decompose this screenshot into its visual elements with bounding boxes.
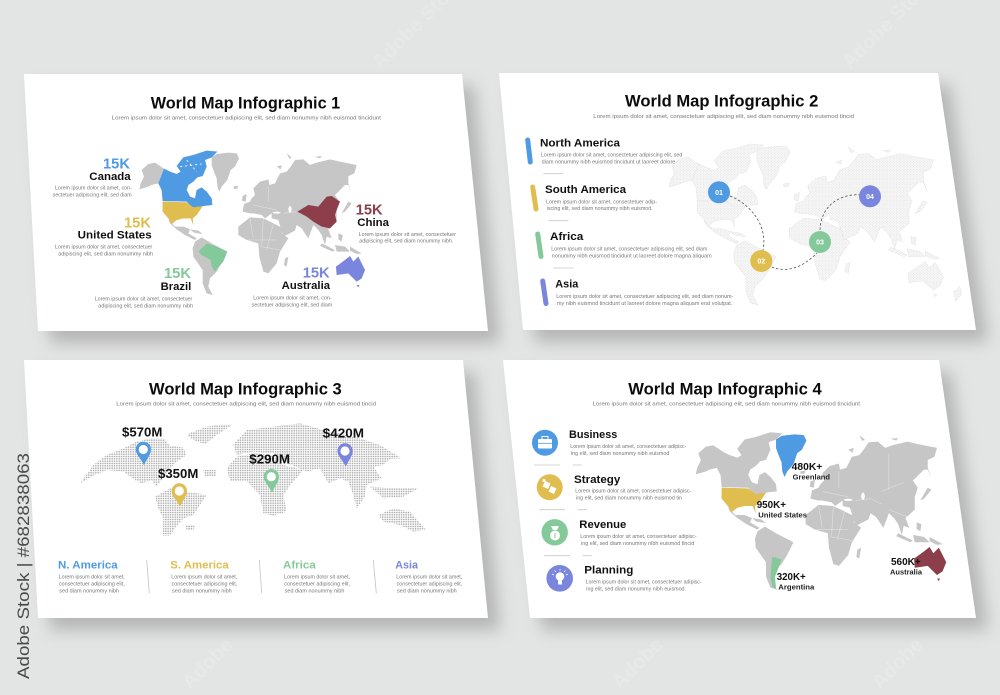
item: South America: iscing elit, sed diam nonummy nibh euismod. <box>547 206 653 212</box>
pin: Africa <box>249 451 290 492</box>
pin: Africa: $290M <box>249 451 290 466</box>
marker 02: 02 <box>757 258 765 266</box>
label: United States <box>757 500 807 519</box>
item: Revenue <box>542 519 697 547</box>
callout: China: 15K <box>356 201 383 218</box>
pin: N. America: $570M <box>122 425 162 440</box>
item: Africa <box>538 231 712 259</box>
item: Africa: nonummy nibh euismod tincidunt ut laoreet dolore magna aliquam <box>552 253 712 259</box>
item: Asia: my nibh euismod tincidunt ut laoreet dolore magna aliquam erat volutpat. <box>557 301 732 307</box>
title 2: World Map Infographic 2 <box>625 93 818 111</box>
stock id side label: Adobe Stock | #682838063 <box>14 453 33 679</box>
subtitle 4: Lorem ipsum dolor sit amet, consectetuer adipiscing elit, sed diam nonummy nibh euismod tincidunt <box>593 401 861 407</box>
marker 04: 04 <box>866 194 874 201</box>
icon: money bag <box>542 519 568 546</box>
callout: United States <box>55 214 153 258</box>
callout: United States: Lorem ipsum dolor sit amet, consectetuer <box>55 245 153 251</box>
item: Strategy <box>537 474 692 502</box>
callout: Brazil <box>95 265 193 309</box>
callout: China: China <box>357 217 390 229</box>
column: Asia <box>395 559 462 594</box>
item: Business: Lorem ipsum dolor sit amet, consectetuer adipisc- <box>570 444 687 450</box>
column: Africa: consectetuer adipiscing elit, <box>284 582 350 588</box>
column: Asia: Asia <box>395 559 419 571</box>
column: Africa <box>283 559 350 594</box>
item: North America <box>528 137 683 165</box>
column: Africa: Lorem ipsum dolor sit amet, <box>284 575 350 581</box>
callout: Australia: Australia <box>282 280 331 292</box>
item: Planning: Planning <box>584 564 633 576</box>
column: N. America: Lorem ipsum dolor sit amet, <box>59 575 125 581</box>
column: S. America: Lorem ipsum dolor sit amet, <box>171 575 237 581</box>
callout: China: Lorem ipsum dolor sit amet, consectetuer <box>359 232 456 238</box>
callout: Australia: 15K <box>303 264 330 281</box>
marker 03: 03 <box>816 240 824 246</box>
callout: Canada <box>53 155 132 199</box>
pin: S. America <box>158 466 198 507</box>
label: Australia <box>890 557 923 576</box>
callout: United States: adipiscing elit, sed diam nonummy nibh <box>58 252 153 258</box>
pin: Asia <box>323 426 364 467</box>
title 3: World Map Infographic 3 <box>149 380 342 398</box>
marker 04 <box>859 185 881 207</box>
subtitle 2: Lorem ipsum dolor sit amet, consectetuer adipiscing elit, sed diam nonummy nibh euismod tincid <box>593 114 854 120</box>
world map with highlighted countries <box>139 151 365 295</box>
title 4: World Map Infographic 4 <box>628 380 823 398</box>
icon: puzzle <box>537 474 563 500</box>
column: S. America: sed diam nonummy nibh <box>172 588 232 594</box>
callout: Canada: 15K <box>103 155 130 172</box>
item: Revenue: Revenue <box>579 519 626 531</box>
callout: China: adipiscing elit, sed diam nonummy nibh. <box>359 239 453 245</box>
item: Asia <box>543 279 734 307</box>
panel: infographic 1 <box>24 74 500 343</box>
background watermark: Adobe <box>868 634 928 694</box>
label: United States: United States <box>758 510 807 519</box>
callout: Australia: Lorem ipsum dolor sit amet, con- <box>253 295 332 301</box>
item: Asia: Lorem ipsum dolor sit amet, consectetuer adipiscing elit, sed diam nonum- <box>556 294 734 300</box>
column: S. America <box>170 559 237 594</box>
item: Planning: Lorem ipsum dolor sit amet, consectetuer adipisc- <box>586 579 702 585</box>
pin: N. America <box>122 425 162 465</box>
subtitle 1: Lorem ipsum dolor sit amet, consectetuer adipiscing elit, sed diam nonummy nibh euismod tincidunt <box>112 116 382 122</box>
title 1: World Map Infographic 1 <box>151 94 340 112</box>
icon: briefcase <box>532 430 558 456</box>
column: Asia: consectetuer adipiscing elit, <box>397 582 462 588</box>
callout: China <box>356 201 456 245</box>
marker 01: 01 <box>715 190 723 197</box>
label: Greenland <box>792 462 830 481</box>
callout: Australia: sectetuer adipiscing elit, sed diam <box>252 302 332 308</box>
callout: Canada: Lorem ipsum dolor sit amet, con- <box>55 186 132 192</box>
marker 01 <box>708 181 730 203</box>
column: Asia: Lorem ipsum dolor sit amet, <box>396 575 462 581</box>
column: S. America: S. America <box>170 559 230 571</box>
item: Business: ing elit, sed diam nonummy nibh euismod <box>571 451 670 457</box>
panel: infographic 2 <box>499 73 988 342</box>
callout: Australia <box>252 264 332 308</box>
panel: infographic 4 <box>503 360 988 630</box>
item: Revenue: Lorem ipsum dolor sit amet, consectetuer adipisc- <box>580 534 697 540</box>
background watermark: Adobe <box>608 634 668 694</box>
curved dot world map <box>80 423 426 536</box>
column: N. America: consectetuer adipiscing elit, <box>59 582 125 588</box>
label: Greenland: Greenland <box>793 472 830 481</box>
item: South America: Lorem ipsum dolor sit amet, consectetuer adip- <box>546 199 657 205</box>
item: Planning: ing elit, sed diam nonummy nibh euismod. <box>586 587 686 593</box>
item: Business: Business <box>569 429 617 441</box>
column: Africa: sed diam nonummy nibh <box>285 588 345 594</box>
marker 02 <box>750 250 772 272</box>
label: Argentina: 320K+ <box>777 572 806 583</box>
item: North America: Lorem ipsum dolor sit amet, consectetuer adipiscing elit, sed <box>541 152 683 158</box>
callout: Brazil: adipiscing elit, sed diam nonummy nibh <box>98 303 193 309</box>
background watermark: Adobe <box>178 634 238 694</box>
pin: Asia: $420M <box>323 426 364 441</box>
label: Argentina <box>777 572 815 591</box>
item: South America: South America <box>545 184 627 196</box>
callout: United States: 15K <box>124 214 151 231</box>
item: Africa: Africa <box>550 231 584 243</box>
item: North America: diam nonummy nibh euismod tincidunt ut laoreet dolore <box>542 159 676 165</box>
label: Argentina: Argentina <box>778 582 815 591</box>
item: Strategy: ing elit, sed diam nonummy nibh euismod tin <box>576 496 682 502</box>
callout: Brazil: 15K <box>164 265 191 282</box>
column: N. America: N. America <box>58 559 119 571</box>
column: N. America: sed diam nonummy nibh <box>59 588 119 594</box>
column: Africa: Africa <box>283 559 317 571</box>
column: N. America <box>58 559 125 594</box>
marker 03 <box>809 231 831 253</box>
label: Greenland: 480K+ <box>792 462 822 473</box>
pin: S. America: $350M <box>158 466 198 481</box>
world map with highlighted countries <box>696 432 946 590</box>
callout: Canada: Canada <box>89 171 132 183</box>
column: Asia: sed diam nonummy nibh <box>397 588 457 594</box>
callout: United States: United States <box>78 230 152 242</box>
callout: Brazil: Brazil <box>161 281 191 293</box>
label: Australia: Australia <box>890 567 923 576</box>
item: South America <box>533 184 657 212</box>
dotted world map <box>669 144 962 305</box>
callout: Brazil: Lorem ipsum dolor sit amet, consectetuer <box>95 296 193 302</box>
item: North America: North America <box>540 137 621 149</box>
item: Planning <box>546 564 702 593</box>
background watermark <box>178 0 941 694</box>
label: United States: 950K+ <box>757 500 786 511</box>
icon: light bulb <box>546 565 573 592</box>
item: Africa: Lorem ipsum dolor sit amet, consectetuer adipiscing elit, sed diam <box>551 246 707 252</box>
subtitle 3: Lorem ipsum dolor sit amet, consectetuer adipiscing elit, sed diam nonummy nibh euismod tincid <box>116 401 376 407</box>
item: Asia: Asia <box>555 279 579 291</box>
item: Revenue: ing elit, sed diam nonummy nibh euismod tincid <box>581 541 695 547</box>
item: Strategy: Lorem ipsum dolor sit amet, consectetuer adipisc- <box>575 489 692 495</box>
label: Australia: 560K+ <box>891 557 921 568</box>
column: S. America: consectetuer adipiscing elit, <box>172 582 237 588</box>
item: Strategy: Strategy <box>574 474 621 486</box>
item: Business <box>532 429 687 457</box>
panel: infographic 3 <box>24 360 500 630</box>
dashed route <box>730 195 860 269</box>
callout: Canada: sectetuer adipiscing elit, sed diam <box>53 193 132 199</box>
